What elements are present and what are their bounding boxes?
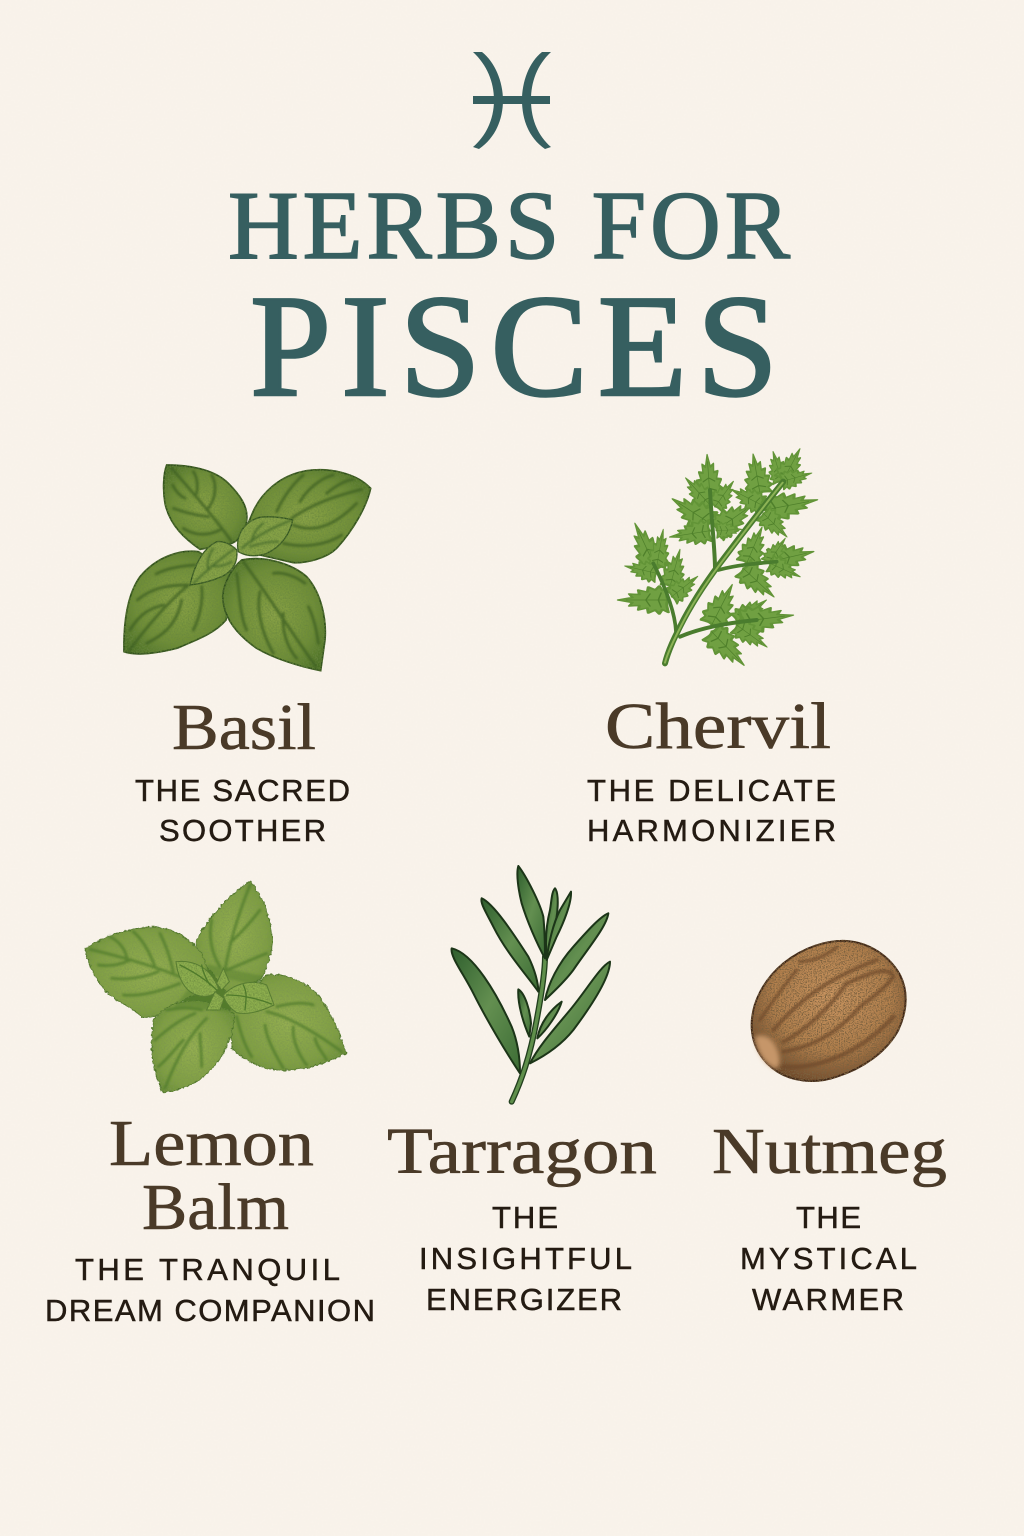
herb: basil [124, 465, 371, 848]
herb: chervil [587, 444, 836, 848]
herb description: SOOTHER [159, 813, 326, 848]
herb description: MYSTICAL [740, 1241, 917, 1276]
herb description: THE [796, 1200, 861, 1235]
herb description: WARMER [752, 1282, 904, 1317]
icon: Pisces zodiac symbol [473, 52, 551, 149]
herb: tarragon [387, 866, 657, 1317]
herb description [419, 1200, 632, 1317]
icon: tarragon sprig [452, 866, 610, 1102]
icon: nutmeg seed [752, 941, 906, 1081]
herb description: THE DELICATE [587, 773, 836, 808]
herb name: Chervil [605, 690, 831, 763]
herb description: INSIGHTFUL [419, 1241, 632, 1276]
herb description: THE TRANQUIL [75, 1252, 340, 1287]
herb description: ENERGIZER [426, 1282, 622, 1317]
herb description [45, 1252, 375, 1328]
icon: chervil sprig [618, 444, 819, 674]
herb name: Basil [172, 691, 316, 764]
herb description: THE [492, 1200, 558, 1235]
herb description [135, 773, 350, 848]
herb name: Tarragon [387, 1115, 657, 1188]
title: PISCES [250, 265, 778, 427]
title: HERBS FOR [228, 172, 791, 280]
herb name: Nutmeg [712, 1115, 947, 1188]
herb description: DREAM COMPANION [45, 1293, 375, 1328]
icon: basil leaves [124, 465, 371, 671]
herb description: THE SACRED [135, 773, 350, 808]
icon: lemon balm leaves [85, 881, 346, 1093]
herb: lemon balm [45, 881, 375, 1328]
herb: nutmeg [712, 941, 947, 1317]
herb description [587, 773, 836, 848]
title [228, 172, 791, 427]
herb description: HARMONIZIER [587, 813, 836, 848]
herb name: Balm [142, 1171, 289, 1244]
herb name [109, 1107, 314, 1244]
herb description [740, 1200, 917, 1317]
herb name: Lemon [109, 1107, 314, 1180]
